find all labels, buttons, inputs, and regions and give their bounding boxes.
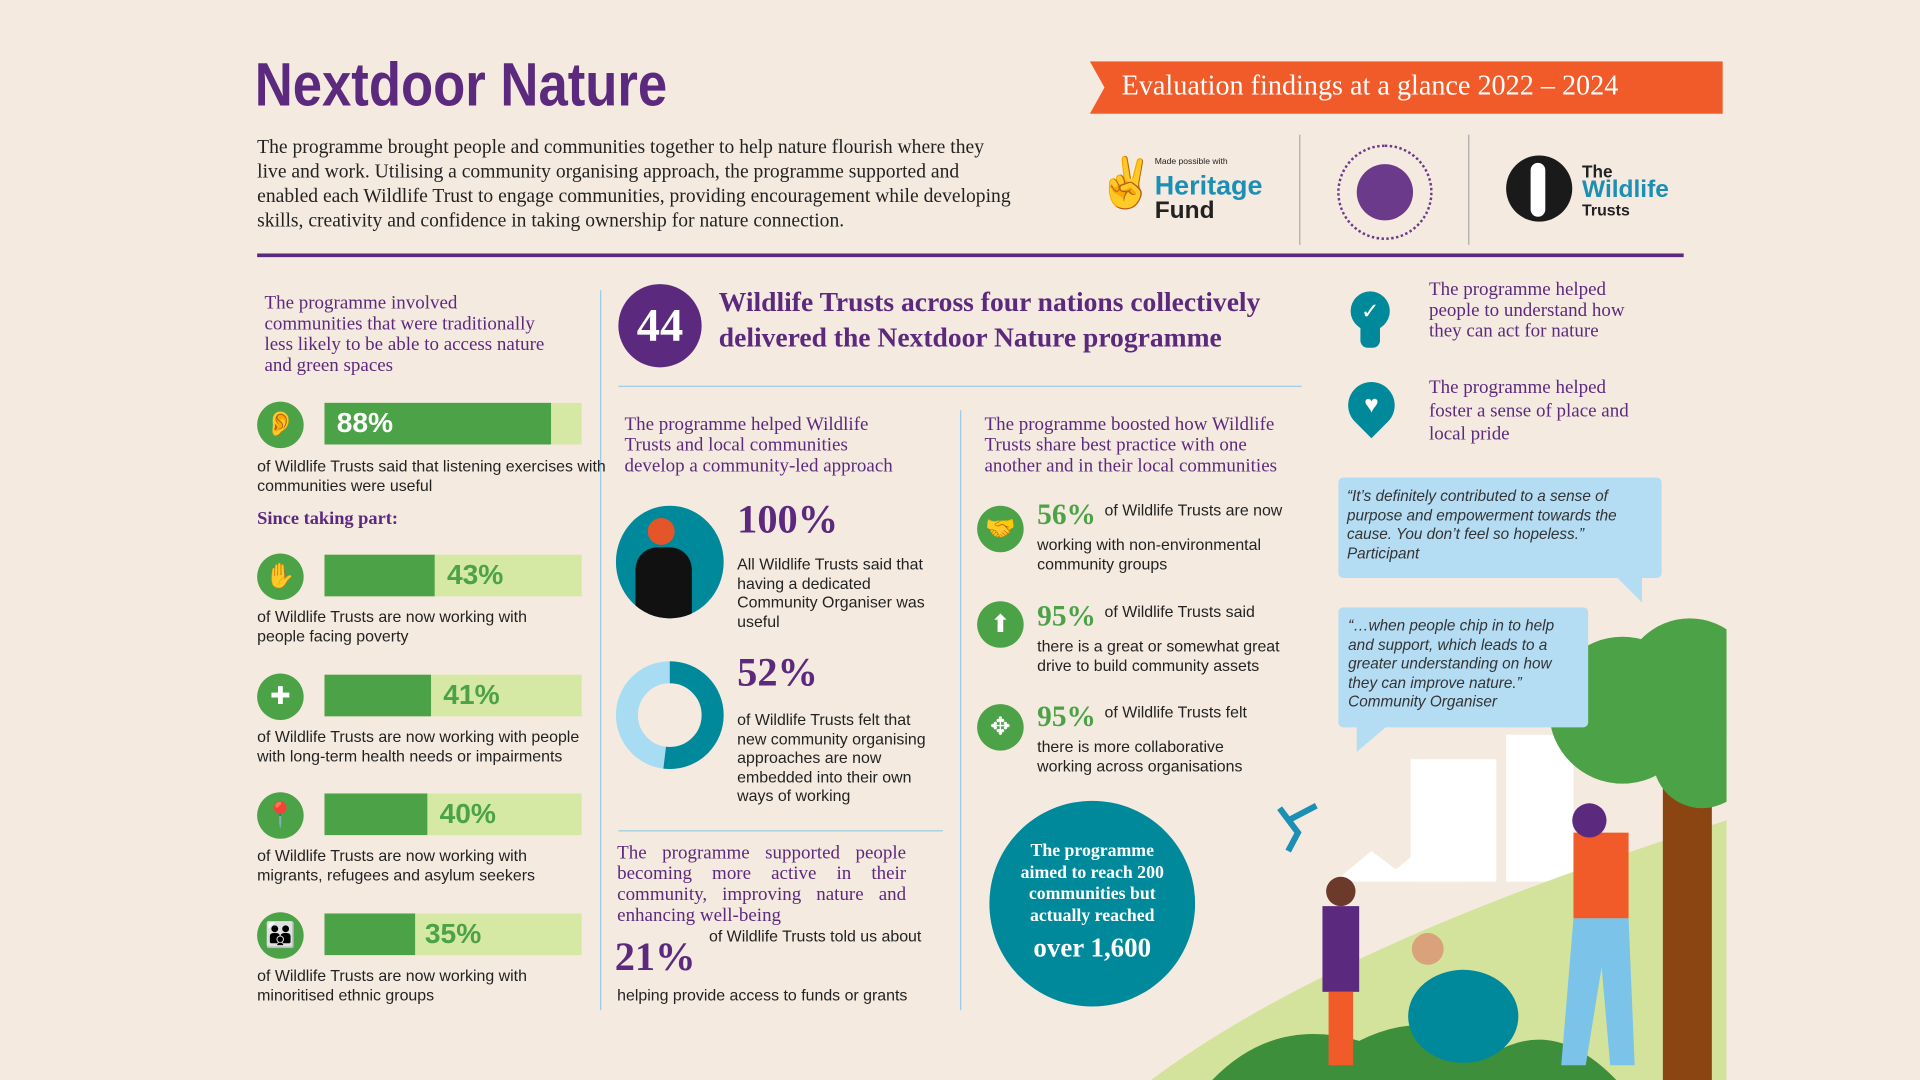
- stat 95% collaborative: ✥: [990, 714, 1011, 741]
- stat 52% donut: [616, 651, 926, 804]
- left heading: and green spaces: [264, 355, 393, 376]
- logo: heritage fund: ✌: [1096, 157, 1157, 211]
- stat 35%: of Wildlife Trusts are now working with minoritised ethnic groups: [257, 966, 527, 1004]
- text: understand: The programme helped: [1429, 279, 1606, 300]
- stat 41%: of Wildlife Trusts are now working with people with long-term health needs or impairments: [257, 727, 579, 765]
- logo: wildlife trusts: Trusts: [1582, 201, 1630, 219]
- text: place and pride: The programme helped: [1429, 377, 1606, 398]
- stat 35%: [257, 912, 582, 1004]
- middle column heading: develop a community-led approach: [624, 456, 893, 476]
- logo: heritage fund: Fund: [1155, 197, 1215, 224]
- logo: heritage fund: Made possible with: [1155, 158, 1228, 167]
- stat 43%: [257, 554, 582, 645]
- stat 95% assets: of Wildlife Trusts said: [1104, 602, 1255, 621]
- intro text: [257, 137, 1011, 231]
- stat 52% donut: 52%: [737, 651, 818, 696]
- logo: heritage fund: [1096, 156, 1263, 224]
- quote: community organiser: [1338, 607, 1588, 752]
- stat 100%: 100%: [737, 498, 838, 542]
- headline 44: delivered the Nextdoor Nature programme: [719, 322, 1222, 353]
- stat 88%: 88%: [337, 407, 393, 438]
- left heading: communities that were traditionally: [264, 313, 535, 334]
- middle column heading: The programme helped Wildlife: [624, 414, 868, 435]
- icon: heart pin: [1339, 372, 1404, 438]
- stat 56%: [977, 500, 1282, 573]
- circle callout: over 1,600: communities but: [1029, 884, 1156, 904]
- quote: participant: [1338, 478, 1662, 602]
- since taking part: Since taking part:: [257, 509, 398, 529]
- stat 95% assets: [977, 601, 1280, 674]
- stat 95% assets: 95%: [1037, 601, 1096, 633]
- stat 95% assets: there is a great or somewhat great drive to build community assets: [1037, 637, 1280, 674]
- stat 21%: of Wildlife Trusts told us about: [709, 927, 921, 945]
- middle column heading: [624, 414, 893, 476]
- quote: participant: “It’s definitely contributed to a sense of purpose and empowerment towards the cause. You don’t feel so hopeless.” Participant: [1347, 487, 1617, 561]
- logo: heritage fund: Heritage: [1155, 170, 1263, 201]
- headline 44: [618, 284, 1260, 368]
- circle callout: over 1,600: [989, 801, 1195, 1007]
- stat 56%: 56%: [1037, 500, 1096, 531]
- right column heading: another and in their local communities: [984, 456, 1277, 476]
- stat 35%: 👪: [265, 922, 296, 949]
- stat 43%: of Wildlife Trusts are now working with people facing poverty: [257, 607, 527, 645]
- stat 56%: of Wildlife Trusts are now: [1104, 501, 1282, 519]
- left heading: [264, 293, 544, 376]
- stat 35%: 35%: [425, 917, 481, 949]
- stat 56%: 🤝: [985, 516, 1016, 542]
- stat 40%: [257, 792, 582, 884]
- stat 100%: All Wildlife Trusts said that having a dedicated Community Organiser was useful: [737, 555, 925, 630]
- stat 43%: ✋: [265, 563, 296, 590]
- stat 88%: 👂: [265, 411, 296, 438]
- stat 43%: 43%: [447, 558, 503, 590]
- stat 41%: [257, 674, 582, 765]
- right column heading: [984, 414, 1277, 476]
- headline 44: 44: [637, 300, 683, 351]
- stat 40%: of Wildlife Trusts are now working with migrants, refugees and asylum seekers: [257, 846, 535, 884]
- stat 21%: [615, 842, 922, 1004]
- stat 56%: working with non-environmental community groups: [1037, 535, 1261, 572]
- banner: evaluation findings: [1090, 61, 1723, 114]
- stat 41%: ✚: [270, 683, 291, 710]
- intro text: enabled each Wildlife Trust to engage communities, providing encouragement while developing: [257, 186, 1011, 207]
- icon: lightbulb: ✓: [1361, 299, 1379, 323]
- left heading: less likely to be able to access nature: [264, 334, 544, 355]
- circle callout: over 1,600: actually reached: [1030, 906, 1154, 925]
- stat 95% assets: ⬆: [990, 611, 1011, 638]
- text: place and pride: local pride: [1429, 424, 1510, 444]
- stat 21%: helping provide access to funds or grants: [617, 986, 907, 1004]
- stat 40%: 📍: [265, 802, 296, 829]
- stat 95% collaborative: 95%: [1037, 702, 1096, 733]
- logo: wildlife trusts: [1506, 156, 1669, 222]
- text: understand: people to understand how: [1429, 300, 1625, 321]
- right column heading: Trusts share best practice with one: [984, 435, 1247, 456]
- text: understand: [1429, 279, 1625, 342]
- quote: community organiser: “…when people chip in to help and support, which leads to a greater understanding on how they can improve nature.” Community Organiser: [1348, 617, 1554, 710]
- logo: wildlife trusts: The: [1582, 162, 1613, 181]
- circle callout: over 1,600: aimed to reach 200: [1021, 863, 1164, 882]
- title: Nextdoor Nature: [255, 50, 667, 119]
- circle callout: over 1,600: over 1,600: [1033, 932, 1151, 962]
- stat 88%: of Wildlife Trusts said that listening exercises with communities were useful: [257, 457, 606, 495]
- banner: evaluation findings: Evaluation findings at a glance 2022 – 2024: [1122, 70, 1618, 100]
- stat 95% collaborative: there is more collaborative working across organisations: [1037, 737, 1242, 774]
- stat 40%: 40%: [440, 797, 496, 829]
- middle column heading: Trusts and local communities: [624, 435, 848, 456]
- stat 52% donut: of Wildlife Trusts felt that new community organising approaches are now embedded into their own ways of working: [737, 710, 926, 804]
- intro text: live and work. Utilising a community organising approach, the programme supported and: [257, 162, 959, 182]
- stat 95% collaborative: [977, 702, 1247, 775]
- circle callout: over 1,600: The programme: [1031, 841, 1154, 861]
- icon: heart pin: ♥: [1364, 392, 1379, 419]
- stat 41%: 41%: [443, 678, 500, 710]
- icon: lightbulb: [1350, 291, 1390, 348]
- logo: jubilee: [1337, 144, 1433, 240]
- stat 100%: [616, 498, 925, 630]
- stat 21%: The programme supported people becoming more active in their community, improving nature and enhancing well-being: [617, 842, 906, 926]
- headline 44: Wildlife Trusts across four nations collectively: [719, 287, 1260, 317]
- intro text: The programme brought people and communities together to help nature flourish where they: [257, 137, 984, 158]
- illustration: people gardening: [1151, 618, 1727, 1080]
- left heading: The programme involved: [264, 293, 457, 313]
- stat 21%: 21%: [615, 936, 696, 980]
- stat 95% collaborative: of Wildlife Trusts felt: [1104, 703, 1247, 721]
- logo: wildlife trusts: Wildlife: [1582, 176, 1669, 203]
- text: place and pride: [1429, 377, 1629, 444]
- text: place and pride: foster a sense of place and: [1429, 400, 1629, 421]
- illustration: organiser: [616, 506, 724, 618]
- right column heading: The programme boosted how Wildlife: [984, 414, 1274, 435]
- left panel: communities: [264, 293, 544, 376]
- intro text: skills, creativity and confidence in taking ownership for nature connection.: [257, 211, 844, 231]
- text: understand: they can act for nature: [1429, 321, 1599, 342]
- stat 88%: [257, 402, 606, 495]
